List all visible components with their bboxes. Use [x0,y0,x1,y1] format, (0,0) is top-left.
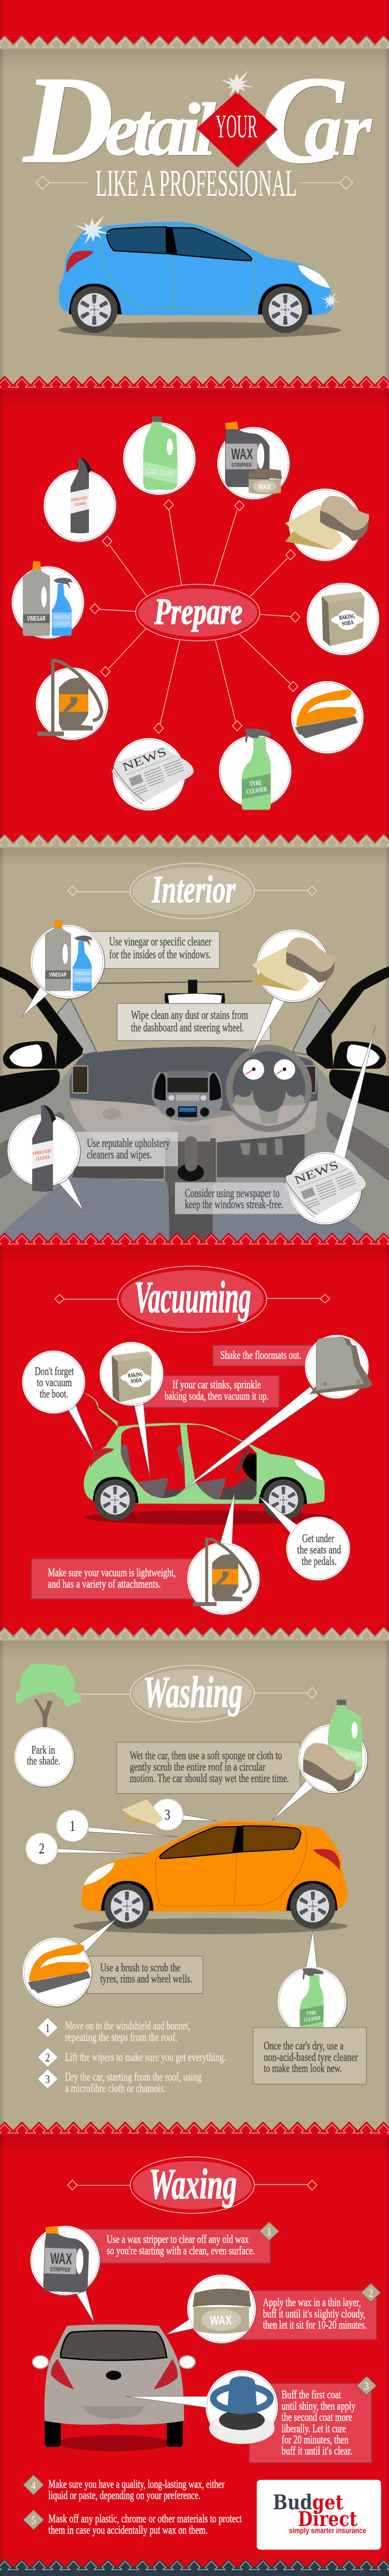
callout: wax stripper: so you're starting with a clean, even surface. [107,2245,255,2257]
callout: upholstery: UPHOLSTERY [32,1148,52,1157]
panel: waxing [23,2157,381,2550]
callout: park in the shade [14,1728,74,1787]
callout number 2: 2 [39,1840,44,1857]
callout: boot [22,1351,94,1452]
callout: windows [22,920,220,1017]
spokes [90,500,300,733]
callout: park in the shade: the shade. [27,1754,60,1767]
callout: windows: WINDOW [74,971,90,976]
callout: buffer: buff it until it's clear. [282,2445,352,2458]
callout: floormats [176,1335,372,1496]
callout: wax: Apply the wax in a thin layer, [263,2297,361,2309]
orange car [73,1821,347,1934]
item: car soap [123,416,196,495]
step 3: a microfibre cloth or chamois. [65,2082,166,2094]
callout: windows: for the insides of the windows. [109,947,211,961]
callout: buffer [125,2370,377,2463]
heading: Detail: D [22,50,113,189]
item: tyre cleaner [219,728,292,810]
tip 5 [23,2510,242,2537]
callout: upholstery: Use reputable upholstery [87,1136,170,1150]
item: newspaper: NEWS [121,745,168,774]
callout: park in the shade: Park in [32,1744,55,1756]
callout: buffer: Buff the first coat [282,2389,341,2401]
callout: seats and pedals: Get under [302,1532,334,1545]
callout: windows: CLEANER [74,976,90,982]
callout: wax: 2 [368,2287,373,2299]
tips [23,2475,242,2537]
heading: prepare [136,584,260,641]
item: vinegar and window cleaner: CLEANER [54,621,70,627]
callout: boot: to vacuum [37,1377,72,1389]
callout: tyre cleaner: non-acid-based tyre cleaner [264,2051,358,2063]
callout: buffer: liberally. Let it cure [282,2423,346,2435]
step 3: Dry the car, starting from the roof, using [65,2071,201,2083]
callout: vacuum: and has a variety of attachments. [48,1578,161,1591]
callout: baking soda: SODA [131,1377,142,1385]
icon: tree [15,1664,81,1727]
item: tyre cleaner: CLEANER [246,785,267,796]
heading: washing: Washing [143,1668,243,1717]
callout: dashboard: the dashboard and steering wheel. [131,1020,244,1034]
tip 4: 4 [31,2480,36,2491]
callout: vacuum: Make sure your vacuum is lightweight, [48,1567,176,1579]
heading: Car: ar [305,88,372,171]
callout: wet the car: gently scrub the entire roof in a circular [129,1760,266,1773]
item: brush [291,681,364,754]
callout: wax: then let it sit for 10-20 minutes. [263,2319,367,2331]
callout: tyre cleaner: to make them look new. [264,2062,342,2074]
callout: buffer: 3 [365,2380,369,2392]
title [22,50,372,204]
step 1: 1 [46,2022,50,2035]
callout: wax [166,2275,381,2344]
callout: wax stripper: 1 [267,2226,272,2237]
callout: upholstery: cleaners and wipes. [87,1148,152,1162]
callout: dashboard: Wipe clean any dust or stains from [131,1008,248,1022]
panel: washing [14,1664,368,2094]
diamond: your [197,70,278,168]
callout: newspaper: Consider using newspaper to [185,1186,280,1200]
callout: baking soda [99,1342,279,1478]
item: newspaper [111,738,194,811]
item: baking soda: SODA [342,619,354,627]
numbered steps [37,2018,226,2094]
callout: newspaper [176,1026,375,1225]
item: wax stripper and wax: WAX [258,483,271,491]
callout number 3: 3 [164,1806,170,1823]
step 1: repeating the steps from the roof. [65,2031,177,2043]
heading: vacuuming: Vacuuming [134,1272,251,1322]
callout: wet the car: motion. The car should stay wet the entire time. [129,1772,289,1784]
item: wax stripper and wax: WAX [231,445,253,463]
icon: sparkle front [320,291,340,309]
panel: vacuuming [22,1266,372,1615]
callout: buffer: for 20 minutes, then [282,2434,348,2446]
tip 4: liquid or paste, depending on your preference. [48,2489,201,2502]
panel: prepare [12,416,380,811]
callout: windows: VINEGAR [49,972,67,979]
callout: seats and pedals [258,1496,351,1581]
tip 5: them in case you accidentally put wax on them. [48,2524,208,2537]
item: car soap: CAR SOAP [146,467,175,478]
callout: wet the car: CAR SOAP [331,1750,360,1761]
callout: brush: Use a brush to scrub the [100,1961,181,1974]
callout: boot: Don't forget [34,1366,74,1378]
callout: wax stripper: STRIPPER [50,2266,71,2274]
green car with open doors [82,1392,333,1525]
item: upholstery cleaner [44,458,117,543]
callout: tyre cleaner: CLEANER [303,2015,321,2023]
tip 5: 5 [31,2515,36,2527]
callout: seats and pedals: the pedals. [302,1555,337,1567]
heading: interior: Interior [151,868,236,911]
callout: buffer: the second coat more [282,2411,352,2424]
item: baking soda: BAKING [339,613,355,622]
heading: vacuuming [55,1266,330,1332]
item: baking soda [307,583,380,656]
heading: interior [68,863,317,919]
panel: interior [8,863,375,1225]
callout: wax stripper [31,2222,279,2323]
callout: boot: the boot. [39,1388,68,1401]
callout: baking soda: baking soda, then vacuum it up. [164,1390,268,1403]
heading: Car: C [260,50,345,189]
item: sponge and cloth [285,489,369,562]
callout: seats and pedals: the seats and [297,1543,341,1556]
step 3 [37,2069,201,2094]
callout number 1 [57,1810,178,1842]
icon: sparkle rear [74,215,110,245]
item: vinegar and window cleaner [12,562,84,639]
step 2: Lift the wipers to make sure you get everything. [65,2051,226,2063]
item: upholstery cleaner: UPHOLSTERY [71,495,88,503]
callout: upholstery [8,1105,177,1211]
blue car [58,215,341,339]
rear view car [32,2324,195,2451]
step 3: 3 [46,2073,50,2086]
heading: washing [81,1665,317,1722]
logo: Budget Direct: Budget [273,2491,343,2514]
logo: Budget Direct: simply smarter insurance [289,2527,366,2535]
item: wax stripper and wax [217,421,290,500]
heading: prepare: Prepare [154,591,243,632]
callout: wax: buff it until it's slightly cloudy, [263,2308,366,2320]
item: tyre cleaner: TYRE [249,778,262,788]
callout: wet the car: Wet the car, then use a soft sponge or cloth to [129,1749,282,1762]
callout: dashboard [117,930,335,1056]
callout: newspaper: NEWS [292,1158,340,1187]
callout: tyre cleaner: Once the car's dry, use a [264,2039,343,2052]
callout number 1: 1 [69,1818,75,1835]
callout number 2 [26,1833,148,1865]
diamond: your: YOUR [216,108,257,145]
callout: buffer: until shiny, then apply [282,2400,356,2413]
panel: interior scene [0,966,389,1246]
tip 4: Make sure you have a quality, long-lasting wax, either [48,2478,225,2491]
heading: Detail: etail [104,88,216,171]
tip 5: Mask off any plastic, chrome or other materials to protect [48,2513,242,2525]
step 1: Move on to the windshield and bonnet, [65,2019,190,2032]
callout: vacuum [32,1493,260,1615]
tip 4 [23,2475,225,2502]
callout: tyre cleaner [253,1929,366,2084]
callout: wet the car [117,1700,368,1821]
heading: waxing [68,2157,317,2213]
item: upholstery cleaner: CLEANER [74,500,87,507]
callout: wax: WAX [210,2313,232,2327]
callout number 3 [122,1799,217,1831]
callout: newspaper: keep the windows streak-free. [185,1197,283,1211]
callout: wax stripper: WAX [50,2250,72,2267]
item: wax stripper and wax: STRIPPER [231,462,252,469]
callout: baking soda: If your car stinks, sprinkle [172,1379,261,1391]
callout: brush [23,1919,203,2007]
item: vinegar and window cleaner: WINDOW [54,615,70,621]
step 2: 2 [46,2052,50,2064]
item: vinegar and window cleaner: VINEGAR [27,615,46,623]
callout: floormats: Shake the floormats out. [220,1349,301,1362]
item: vacuum [36,660,109,741]
callout: brush: tyres, rims and wheel wells. [100,1973,192,1985]
callout: wax stripper: Use a wax stripper to clear off any old wax [107,2233,249,2246]
callout: upholstery: CLEANER [36,1154,51,1162]
callout: windows: Use vinegar or specific cleaner [109,935,211,949]
step 1 [37,2018,190,2043]
logo: Budget Direct [257,2480,381,2550]
logo: Budget Direct: Direct [298,2508,357,2531]
step 2 [37,2047,226,2067]
heading: waxing: Waxing [149,2160,237,2208]
callout: baking soda: BAKING [128,1372,143,1379]
callout: tyre cleaner: TYRE [306,2009,317,2017]
